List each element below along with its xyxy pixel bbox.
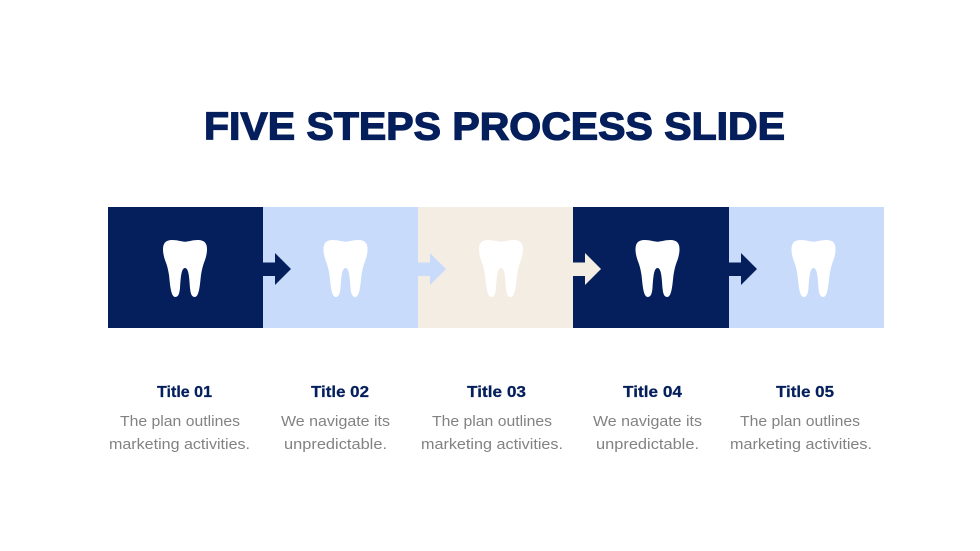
arrow: step 4 to 5: [729, 253, 757, 285]
text block: step 4: We navigate its: [593, 413, 702, 430]
text block: step 5: [730, 384, 872, 453]
text block: step 4: Title 04: [623, 384, 682, 401]
panel: step 1: [108, 207, 263, 328]
text block: step 3: The plan outlines: [432, 413, 552, 430]
arrow: step 1 to 2: [263, 253, 291, 285]
text block: step 5: The plan outlines: [740, 413, 860, 430]
arrow: step 2 to 3: [418, 253, 446, 285]
text block: step 3: marketing activities.: [421, 436, 563, 453]
panel: step 2: [263, 207, 418, 328]
panel: step 3: [418, 207, 573, 328]
panel: step 4: [573, 207, 729, 328]
text block: step 1: The plan outlines: [120, 413, 240, 430]
process band: [108, 207, 884, 328]
arrow: step 3 to 4: [573, 253, 601, 285]
text block: step 3: [421, 384, 563, 453]
text block: step 2: unpredictable.: [284, 436, 387, 453]
text block: step 1: marketing activities.: [109, 436, 250, 453]
title: FIVE STEPS PROCESS SLIDE: [204, 106, 785, 148]
text block: step 4: unpredictable.: [596, 436, 699, 453]
panel: step 5: [729, 207, 884, 328]
text block: step 2: Title 02: [311, 384, 369, 401]
text block: step 3: Title 03: [467, 384, 526, 401]
text block: step 2: [281, 384, 390, 453]
text block: step 4: [593, 384, 702, 453]
text block: step 1: Title 01: [157, 384, 212, 401]
text block: step 5: Title 05: [776, 384, 834, 401]
text block: step 5: marketing activities.: [730, 436, 872, 453]
text block: step 1: [109, 384, 250, 453]
text block: step 2: We navigate its: [281, 413, 390, 430]
